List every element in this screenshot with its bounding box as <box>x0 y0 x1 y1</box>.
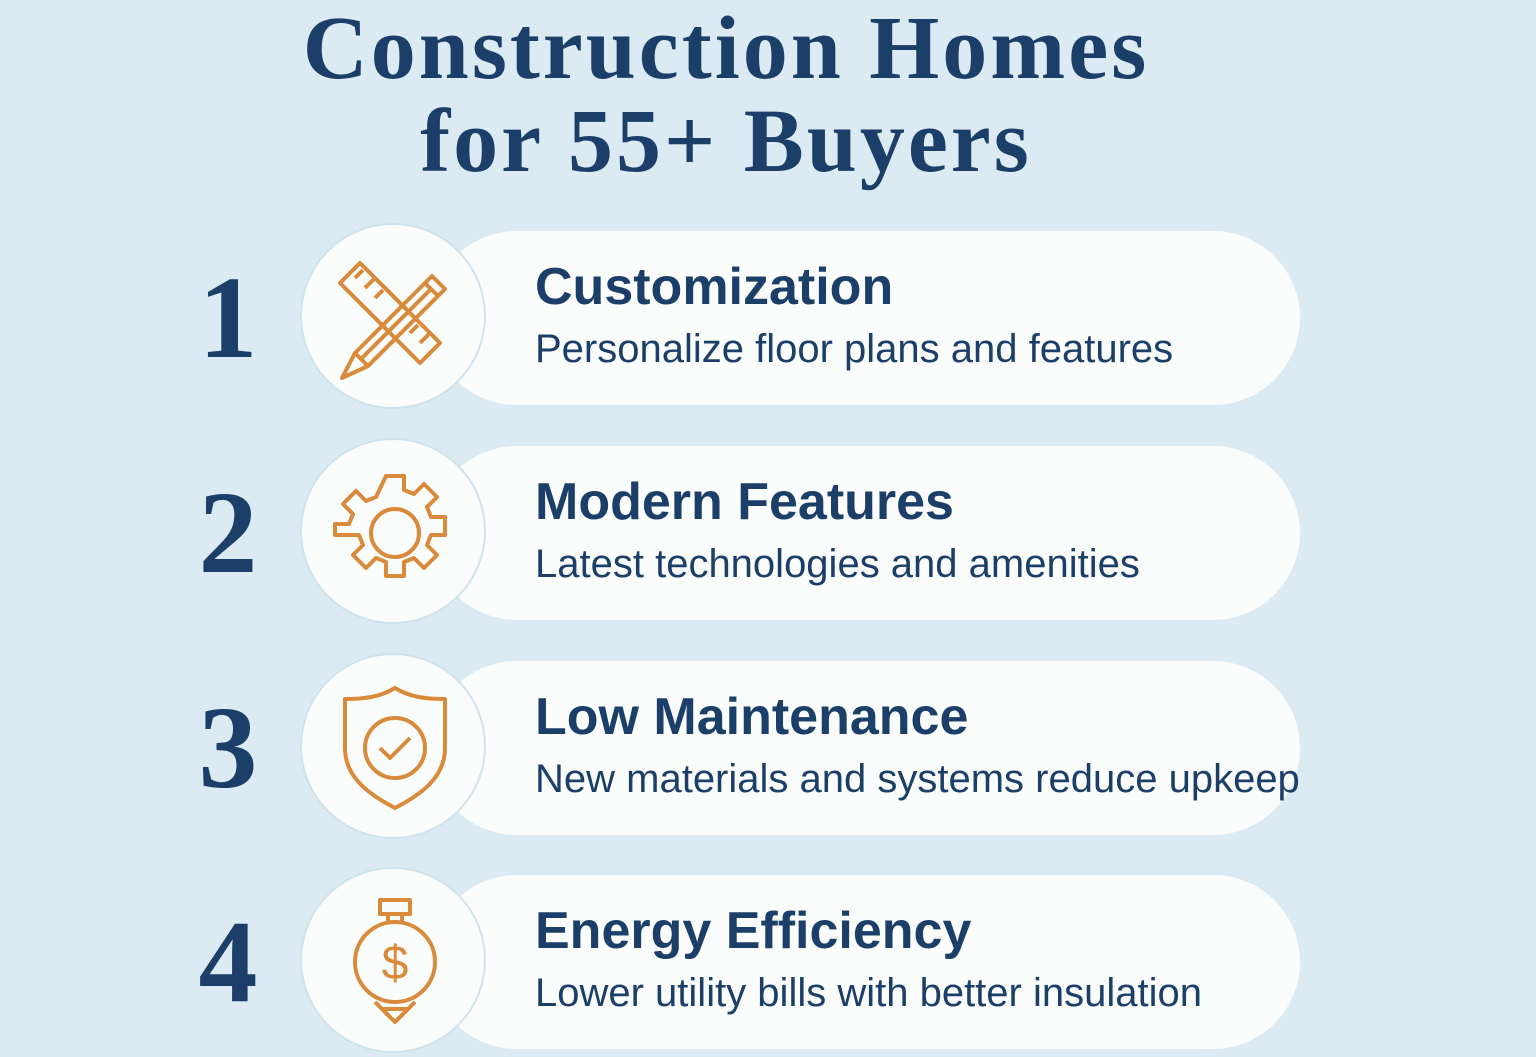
number 2: 2 <box>198 467 258 598</box>
icon: dollar meter <box>300 867 486 1053</box>
icon: dollar meter: $ <box>382 937 408 990</box>
heading: Modern Features <box>535 473 954 531</box>
title: Construction Homes <box>303 0 1149 98</box>
icon: gear <box>300 438 486 624</box>
row 4: energy efficiency <box>198 867 1300 1053</box>
title: for 55+ Buyers <box>420 92 1032 191</box>
description: Latest technologies and amenities <box>535 542 1140 586</box>
description: New materials and systems reduce upkeep <box>535 757 1300 801</box>
pill 2 <box>430 446 1300 620</box>
description: Lower utility bills with better insulation <box>535 971 1202 1015</box>
icon: shield check <box>300 653 486 839</box>
heading: Low Maintenance <box>535 688 968 746</box>
pill 4 <box>430 875 1300 1049</box>
heading: Customization <box>535 258 893 316</box>
row 1: customization <box>198 223 1300 409</box>
row 2: modern features <box>198 438 1300 624</box>
heading: Energy Efficiency <box>535 902 971 960</box>
row 3: low maintenance <box>198 653 1300 839</box>
number 3: 3 <box>198 682 258 813</box>
description: Personalize floor plans and features <box>535 327 1173 371</box>
number 4: 4 <box>198 896 258 1027</box>
number 1: 1 <box>198 252 258 383</box>
pill 3 <box>430 661 1300 835</box>
title <box>303 0 1149 191</box>
icon: ruler and pencil <box>300 223 486 409</box>
pill 1 <box>430 231 1300 405</box>
